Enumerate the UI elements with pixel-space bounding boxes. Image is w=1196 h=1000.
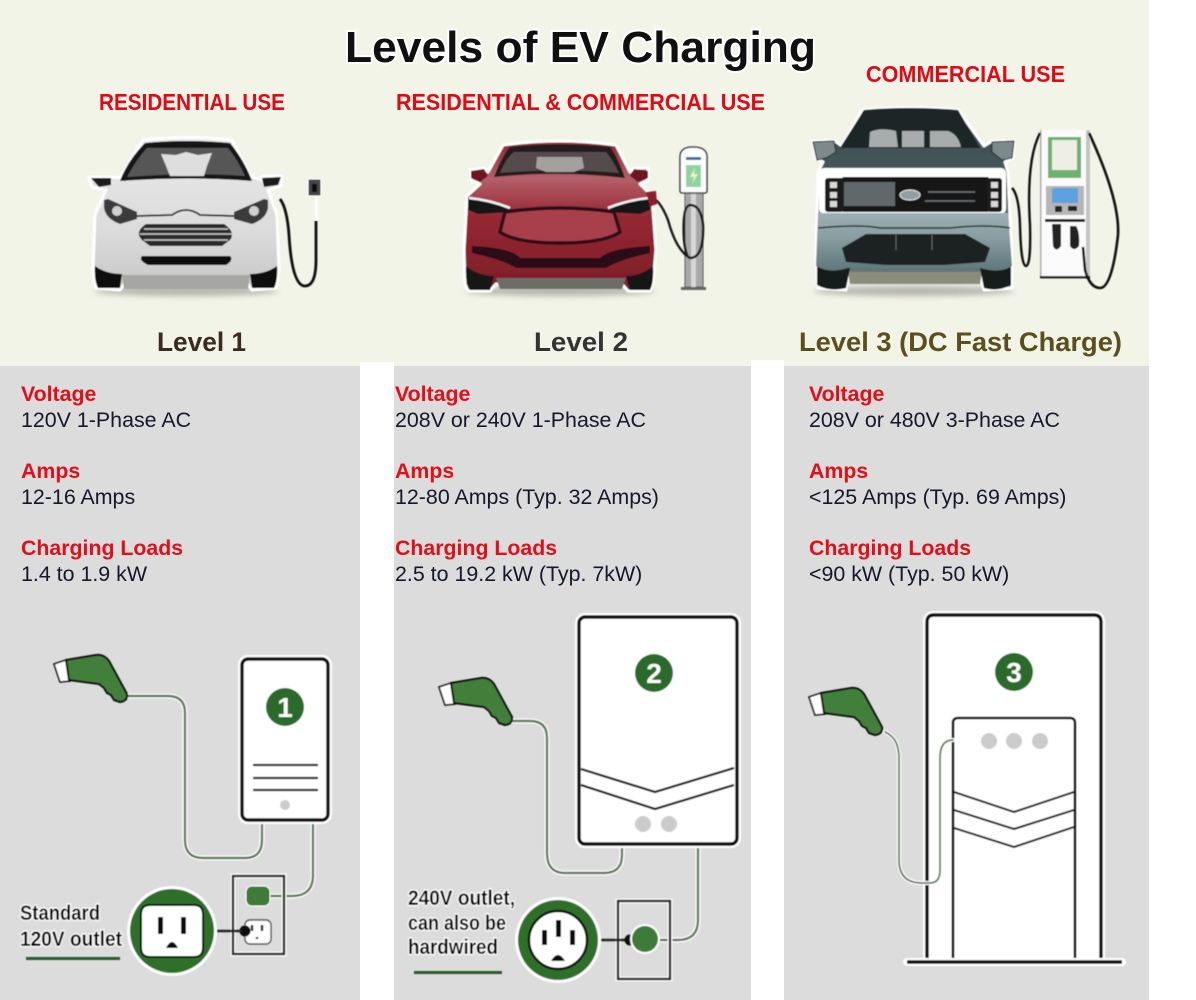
specs: level 2: 2.5 to 19.2 kW (Typ. 7kW)	[395, 562, 642, 586]
use label: residential: RESIDENTIAL USE	[99, 89, 285, 115]
specs: level 3: Voltage	[809, 382, 884, 406]
gap between panels 1 and 2	[360, 362, 394, 366]
panel: level 1 background	[0, 366, 360, 1000]
caption: 240V outlet: hardwired	[408, 936, 498, 959]
caption: standard 120V outlet: 120V outlet	[20, 928, 122, 951]
caption: 240V outlet	[408, 887, 515, 974]
header band	[0, 0, 1149, 366]
charger unit 1: 1	[277, 692, 293, 723]
caption: standard 120V outlet: Standard	[20, 902, 100, 925]
panel: level 3 background	[784, 366, 1149, 1000]
specs: level 1: Charging Loads	[21, 536, 183, 560]
wall plate with hardwired junction	[598, 901, 670, 979]
specs: level 3: <125 Amps (Typ. 69 Amps)	[809, 485, 1066, 509]
diagram: level 3 DC fast charger	[809, 615, 1122, 962]
wall outlet plate with plug	[212, 876, 284, 954]
heading: level 3: Level 3 (DC Fast Charge)	[799, 327, 1122, 357]
icon: 120V outlet	[127, 886, 217, 976]
cable: connector to charger	[513, 721, 622, 873]
specs: level 3: <90 kW (Typ. 50 kW)	[809, 562, 1009, 586]
cable: charger to outlet plug	[270, 822, 313, 896]
specs: level 1: Voltage	[21, 382, 96, 406]
heading: level 2: Level 2	[534, 327, 628, 357]
charger unit 3: 3	[1006, 657, 1022, 688]
charger unit 1	[242, 659, 328, 820]
panel: level 2 background	[394, 366, 751, 1000]
use label: commercial: COMMERCIAL USE	[866, 61, 1065, 87]
illustration: red car with pedestal charger	[464, 141, 707, 296]
specs: level 2: Charging Loads	[395, 536, 557, 560]
specs: level 2	[395, 382, 659, 586]
gap between panels 2 and 3	[751, 360, 784, 366]
illustration: white car with wall charger	[89, 138, 321, 296]
charger unit 3	[907, 615, 1122, 962]
specs: level 1	[21, 382, 191, 586]
cable: charger to outlet	[658, 845, 698, 940]
specs: level 1: 120V 1-Phase AC	[21, 408, 191, 432]
specs: level 3: 208V or 480V 3-Phase AC	[809, 408, 1060, 432]
diagram: level 2 wall charger	[408, 617, 737, 983]
diagram: level 1 home charger	[20, 655, 328, 976]
charger unit 2: 2	[646, 658, 662, 689]
cable: connector to charger	[885, 732, 953, 883]
cable: connector to charger	[128, 696, 262, 858]
specs: level 2: 12-80 Amps (Typ. 32 Amps)	[395, 485, 659, 509]
icon: 240V outlet	[515, 897, 601, 983]
charger unit 2	[579, 617, 737, 844]
specs: level 1: 1.4 to 1.9 kW	[21, 562, 148, 586]
icon: charging connector	[54, 655, 127, 702]
heading: level 1: Level 1	[157, 327, 246, 357]
specs: level 2: Voltage	[395, 382, 470, 406]
specs: level 3: Amps	[809, 459, 868, 483]
specs: level 2: 208V or 240V 1-Phase AC	[395, 408, 646, 432]
caption: 240V outlet: can also be	[408, 912, 506, 935]
caption: standard 120V outlet	[20, 902, 122, 960]
specs: level 3: Charging Loads	[809, 536, 971, 560]
specs: level 2: Amps	[395, 459, 454, 483]
specs: level 3	[809, 382, 1066, 586]
use label: residential and commercial: RESIDENTIAL & COMMERCIAL USE	[396, 89, 765, 115]
icon: charging connector	[809, 688, 882, 735]
specs: level 1: Amps	[21, 459, 80, 483]
caption: 240V outlet: 240V outlet,	[408, 887, 515, 910]
title: Levels of EV Charging	[345, 23, 816, 72]
specs: level 1: 12-16 Amps	[21, 485, 135, 509]
illustration: pickup truck with DC fast charger	[813, 108, 1118, 296]
icon: charging connector	[439, 678, 512, 725]
